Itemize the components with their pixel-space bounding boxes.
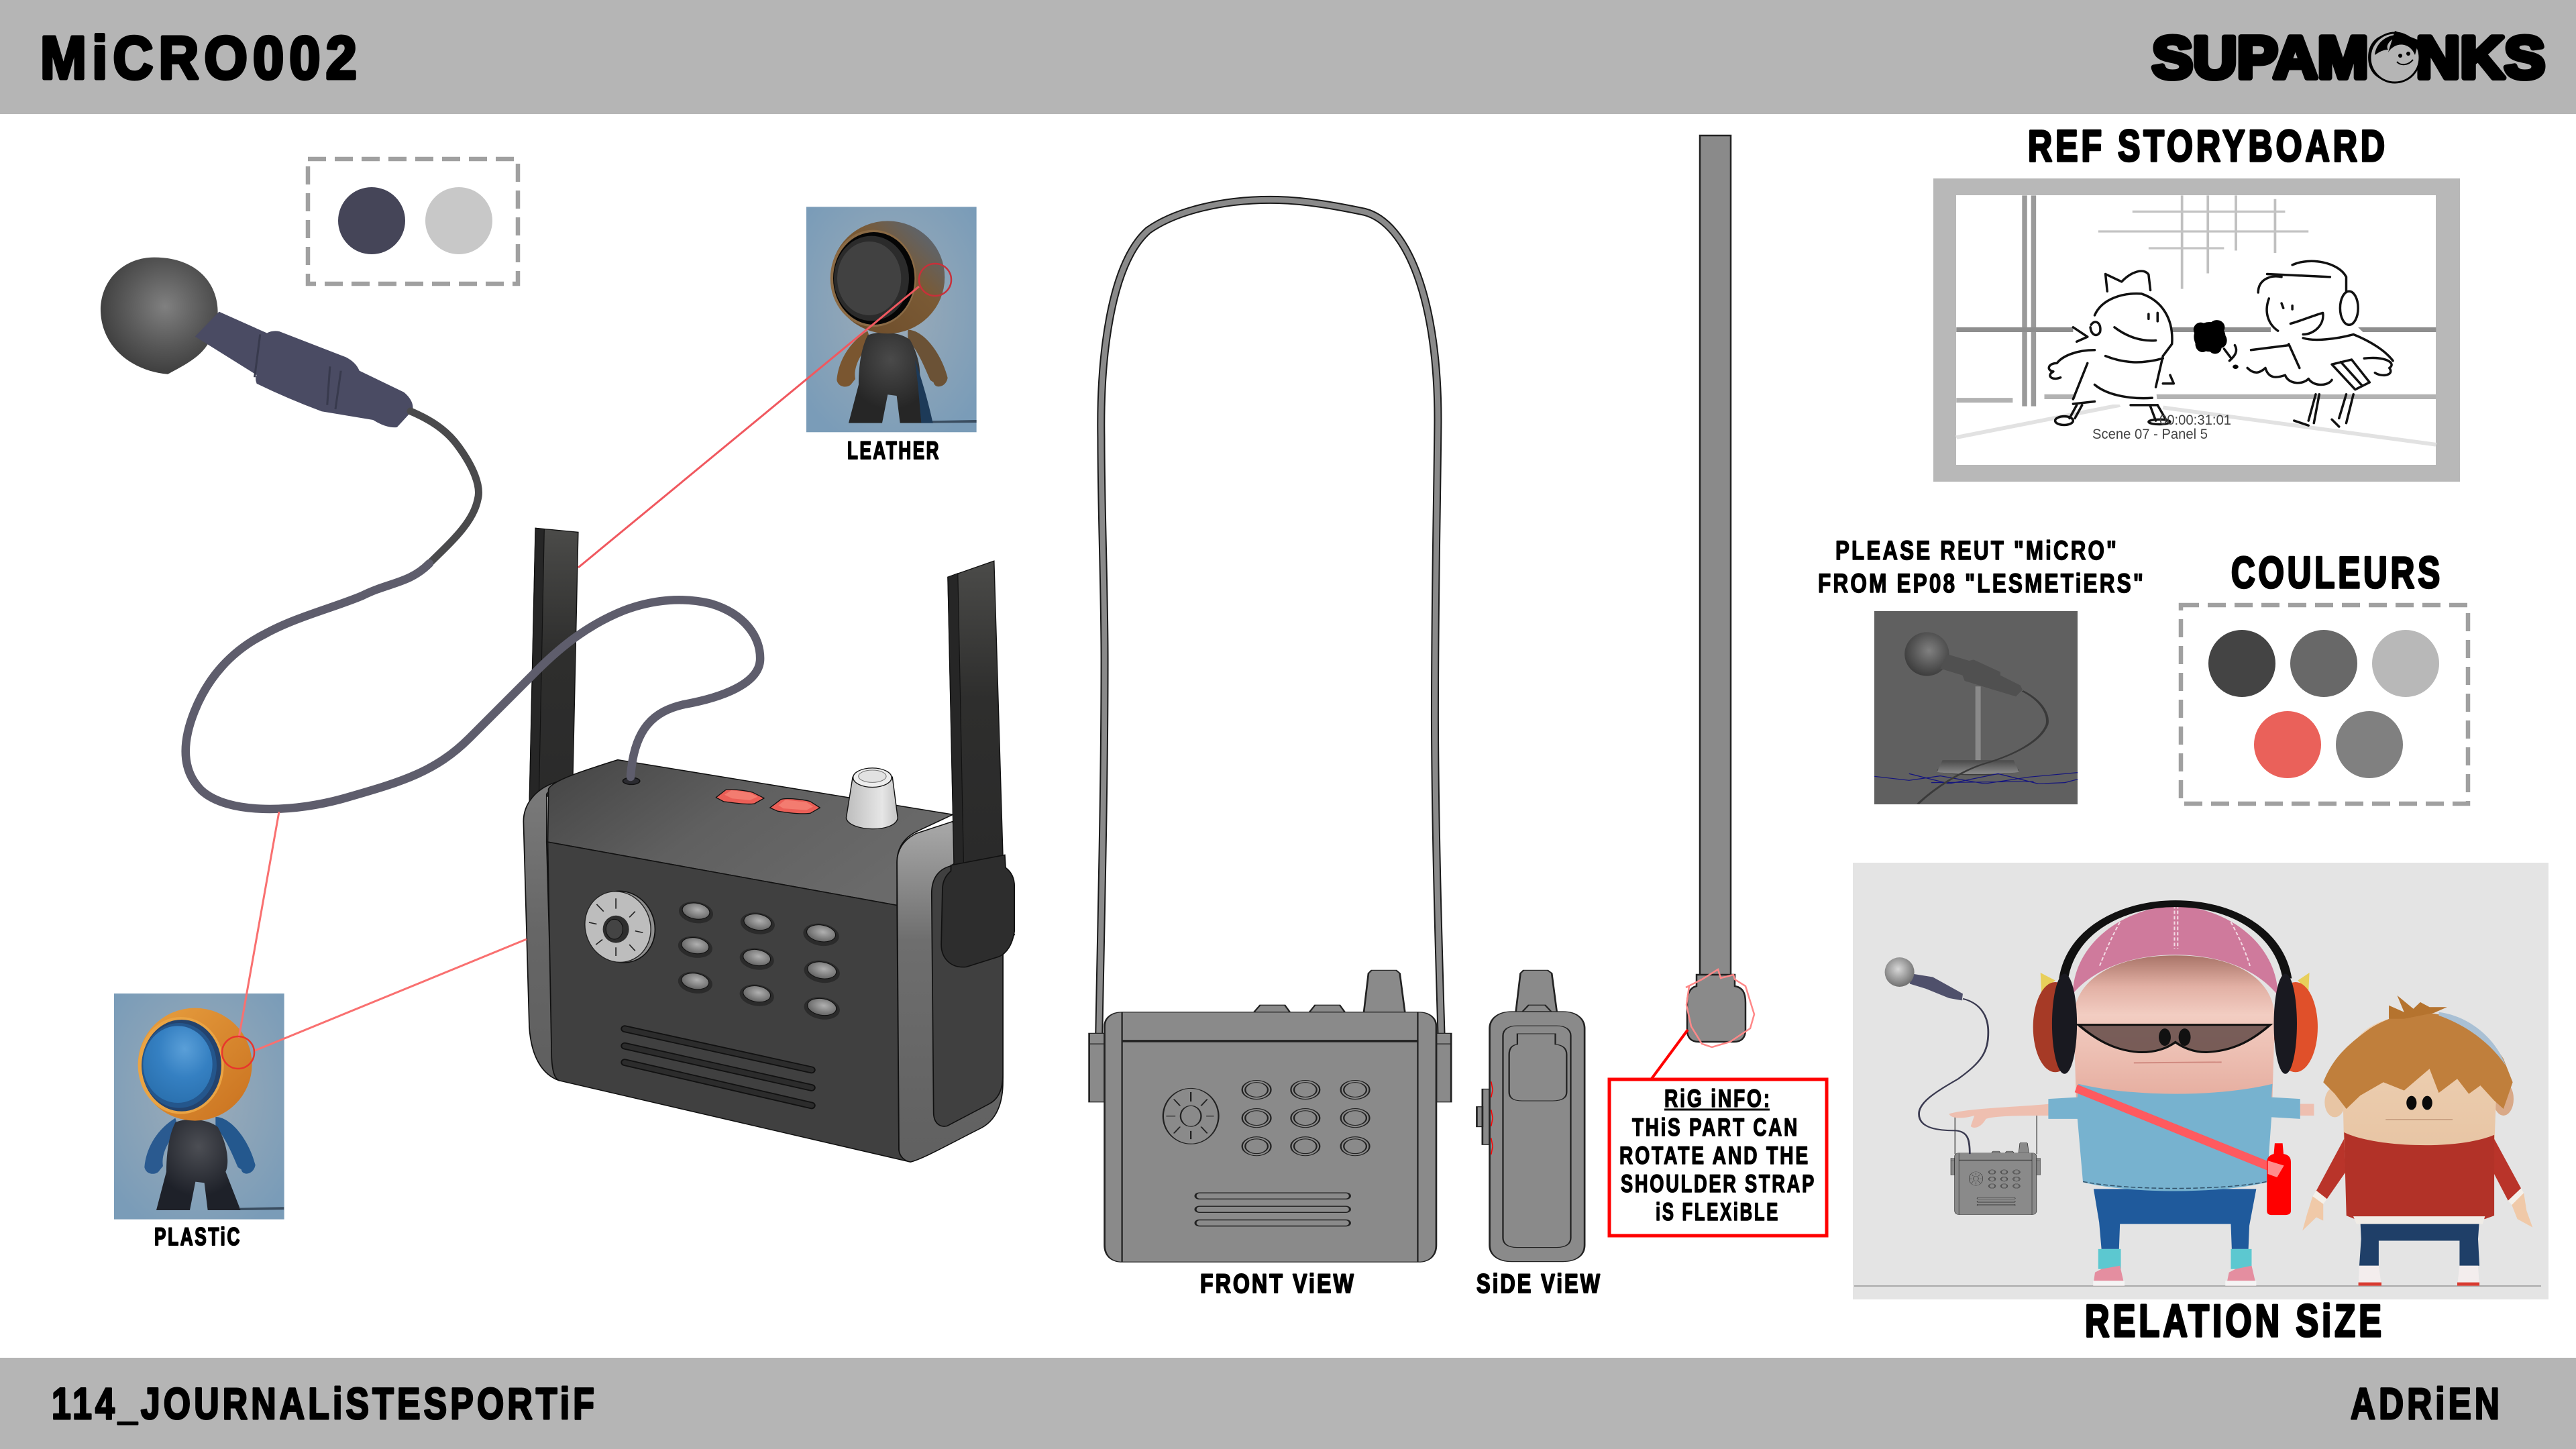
callout: rig info: SHOULDER STRAP	[1621, 1170, 1816, 1197]
box front face	[548, 842, 910, 1162]
side view recorder	[1477, 970, 1585, 1262]
heading: couleurs: COULEURS	[2231, 547, 2443, 597]
callout circle: leather	[919, 264, 951, 296]
eyes	[2406, 1096, 2432, 1110]
callout: rig info: ROTATE AND THE	[1619, 1142, 1810, 1169]
box left side band	[523, 782, 559, 1081]
mouth	[2385, 1118, 2453, 1120]
label: front view: FRONT ViEW	[1200, 1269, 1356, 1299]
recorder: left shoulder strap	[529, 528, 578, 808]
hair tuft	[2389, 996, 2447, 1019]
strap clip	[2268, 1161, 2284, 1177]
callout line: leather to strap	[578, 286, 919, 568]
side knob	[1516, 970, 1557, 1012]
handle ridges	[255, 334, 341, 409]
right strap edge	[948, 574, 963, 866]
jeans	[2359, 1219, 2479, 1266]
character: small boy	[2302, 996, 2532, 1286]
note: please reuse micro: PLEASE REUT "MiCRO"	[1835, 536, 2118, 566]
ear pads	[2052, 974, 2077, 1074]
ear cup shells	[2033, 982, 2078, 1072]
arm	[1949, 1104, 2051, 1128]
body	[1105, 1012, 1436, 1262]
mic cable: lower section	[186, 564, 760, 809]
top panel line	[1122, 1038, 1417, 1044]
label: leather: LEATHER	[847, 437, 941, 464]
mic cable: upper dark section	[411, 411, 478, 564]
red buttons	[716, 790, 820, 814]
cap stitching	[2099, 906, 2250, 967]
callout circle: plastic	[222, 1036, 254, 1069]
callout: rig info	[1609, 1079, 1827, 1236]
mouth	[2134, 1061, 2222, 1064]
strap clip	[941, 855, 1014, 967]
callout: rig info: iS FLEXiBLE	[1656, 1198, 1780, 1226]
side button	[1523, 1005, 1551, 1012]
right strap	[948, 561, 1003, 866]
character white masks	[2073, 264, 2393, 405]
grille	[1195, 1193, 1350, 1226]
flat shoulder strap with clip	[1686, 136, 1754, 1047]
t-shirt	[2048, 1084, 2300, 1191]
panel: relation size	[1853, 863, 2548, 1299]
sleeves	[2316, 1139, 2521, 1201]
dial	[1163, 1088, 1218, 1144]
title: MiCRO002	[40, 25, 362, 92]
yellow accents	[2041, 973, 2310, 992]
nostrils	[2159, 1028, 2171, 1046]
heading: ref storyboard: REF STORYBOARD	[2028, 121, 2388, 170]
red recorder silhouette	[2267, 1143, 2291, 1215]
header bar	[0, 0, 2576, 114]
red button marks	[1491, 1081, 1493, 1155]
headband	[2063, 904, 2288, 979]
arrow: rig info pointer	[1652, 1030, 1688, 1079]
3D recorder box	[523, 561, 1014, 1162]
logo: Supamonks: SUPAMONKS	[2152, 24, 2545, 91]
footer artist name: ADRiEN	[2351, 1379, 2503, 1428]
keypad buttons	[676, 899, 842, 1022]
left character	[2049, 271, 2174, 425]
hands	[2302, 1193, 2532, 1231]
hair highlight	[2438, 1012, 2506, 1065]
right character	[2247, 261, 2393, 427]
keypad	[1242, 1080, 1369, 1156]
sunglasses	[2078, 1025, 2270, 1053]
callout line: plastic to cable	[239, 812, 279, 1038]
label: plastic: PLASTiC	[154, 1223, 241, 1250]
footer bar	[0, 1358, 2576, 1449]
silver knob	[846, 768, 898, 829]
side tabs	[1477, 1089, 1490, 1144]
legs and jeans	[2094, 1189, 2256, 1249]
microphone	[101, 258, 413, 427]
body seams	[1122, 1012, 1417, 1262]
panel: existing microphone reference	[1874, 611, 2078, 804]
panel: plastic material reference	[114, 994, 284, 1220]
callout line: plastic to box	[255, 939, 527, 1051]
storyboard scene caption: Scene 07 - Panel 5	[2092, 427, 2208, 442]
note: please reuse micro	[1818, 536, 2145, 598]
front view recorder	[1089, 970, 1451, 1262]
strap lugs	[1089, 1033, 1451, 1102]
side strap clip	[1509, 1034, 1566, 1101]
box top face	[548, 760, 953, 905]
cable socket	[623, 777, 640, 784]
heading: relation size: RELATION SiZE	[2085, 1295, 2385, 1346]
waistband	[2353, 1216, 2485, 1224]
head	[2343, 1016, 2497, 1149]
storyboard timecode: 00:00:31:01	[2159, 413, 2231, 428]
panel: storyboard frame	[1933, 178, 2460, 482]
rotation sketch outline	[1686, 969, 1754, 1047]
speaker grille	[625, 1029, 812, 1106]
red sash	[2075, 1085, 2275, 1171]
cuffs	[2312, 1188, 2524, 1205]
shoes	[2359, 1266, 2479, 1286]
storyboard sketch	[1956, 195, 2436, 445]
mic head	[101, 258, 218, 374]
footer episode label: 114_JOURNALiSTESPORTiF	[52, 1379, 598, 1428]
callout: rig info: RiG iNFO:	[1664, 1085, 1772, 1112]
cap	[2073, 906, 2278, 996]
sneakers	[2093, 1249, 2256, 1286]
mic handle	[195, 312, 413, 427]
head	[2074, 955, 2275, 1097]
panel: colour swatches	[2181, 605, 2468, 804]
background lines	[1956, 195, 2436, 445]
panel: microphone colour swatches	[308, 159, 518, 284]
box right inner panel	[932, 863, 1003, 1126]
hem stitching	[2083, 1181, 2267, 1189]
character: tall journalist	[1949, 904, 2318, 1286]
scale sketch: mini microphone and recorder	[1885, 957, 2040, 1215]
top buttons and knob	[1254, 970, 1405, 1012]
panel: leather material reference	[806, 207, 977, 432]
note: please reuse micro: FROM EP08 "LESMETiERS"	[1818, 569, 2145, 598]
callout: rig info: THiS PART CAN	[1632, 1114, 1799, 1141]
sweater	[2344, 1132, 2494, 1219]
side body	[1490, 1012, 1585, 1262]
front view shoulder strap	[1099, 200, 1442, 1034]
label: side view: SiDE ViEW	[1477, 1269, 1602, 1299]
ears	[2324, 1087, 2345, 1117]
side inner panel	[1503, 1026, 1570, 1248]
box right side	[897, 821, 1014, 1162]
dial	[579, 886, 661, 967]
scribbled microphone	[2194, 320, 2239, 369]
hair	[2323, 1012, 2513, 1109]
